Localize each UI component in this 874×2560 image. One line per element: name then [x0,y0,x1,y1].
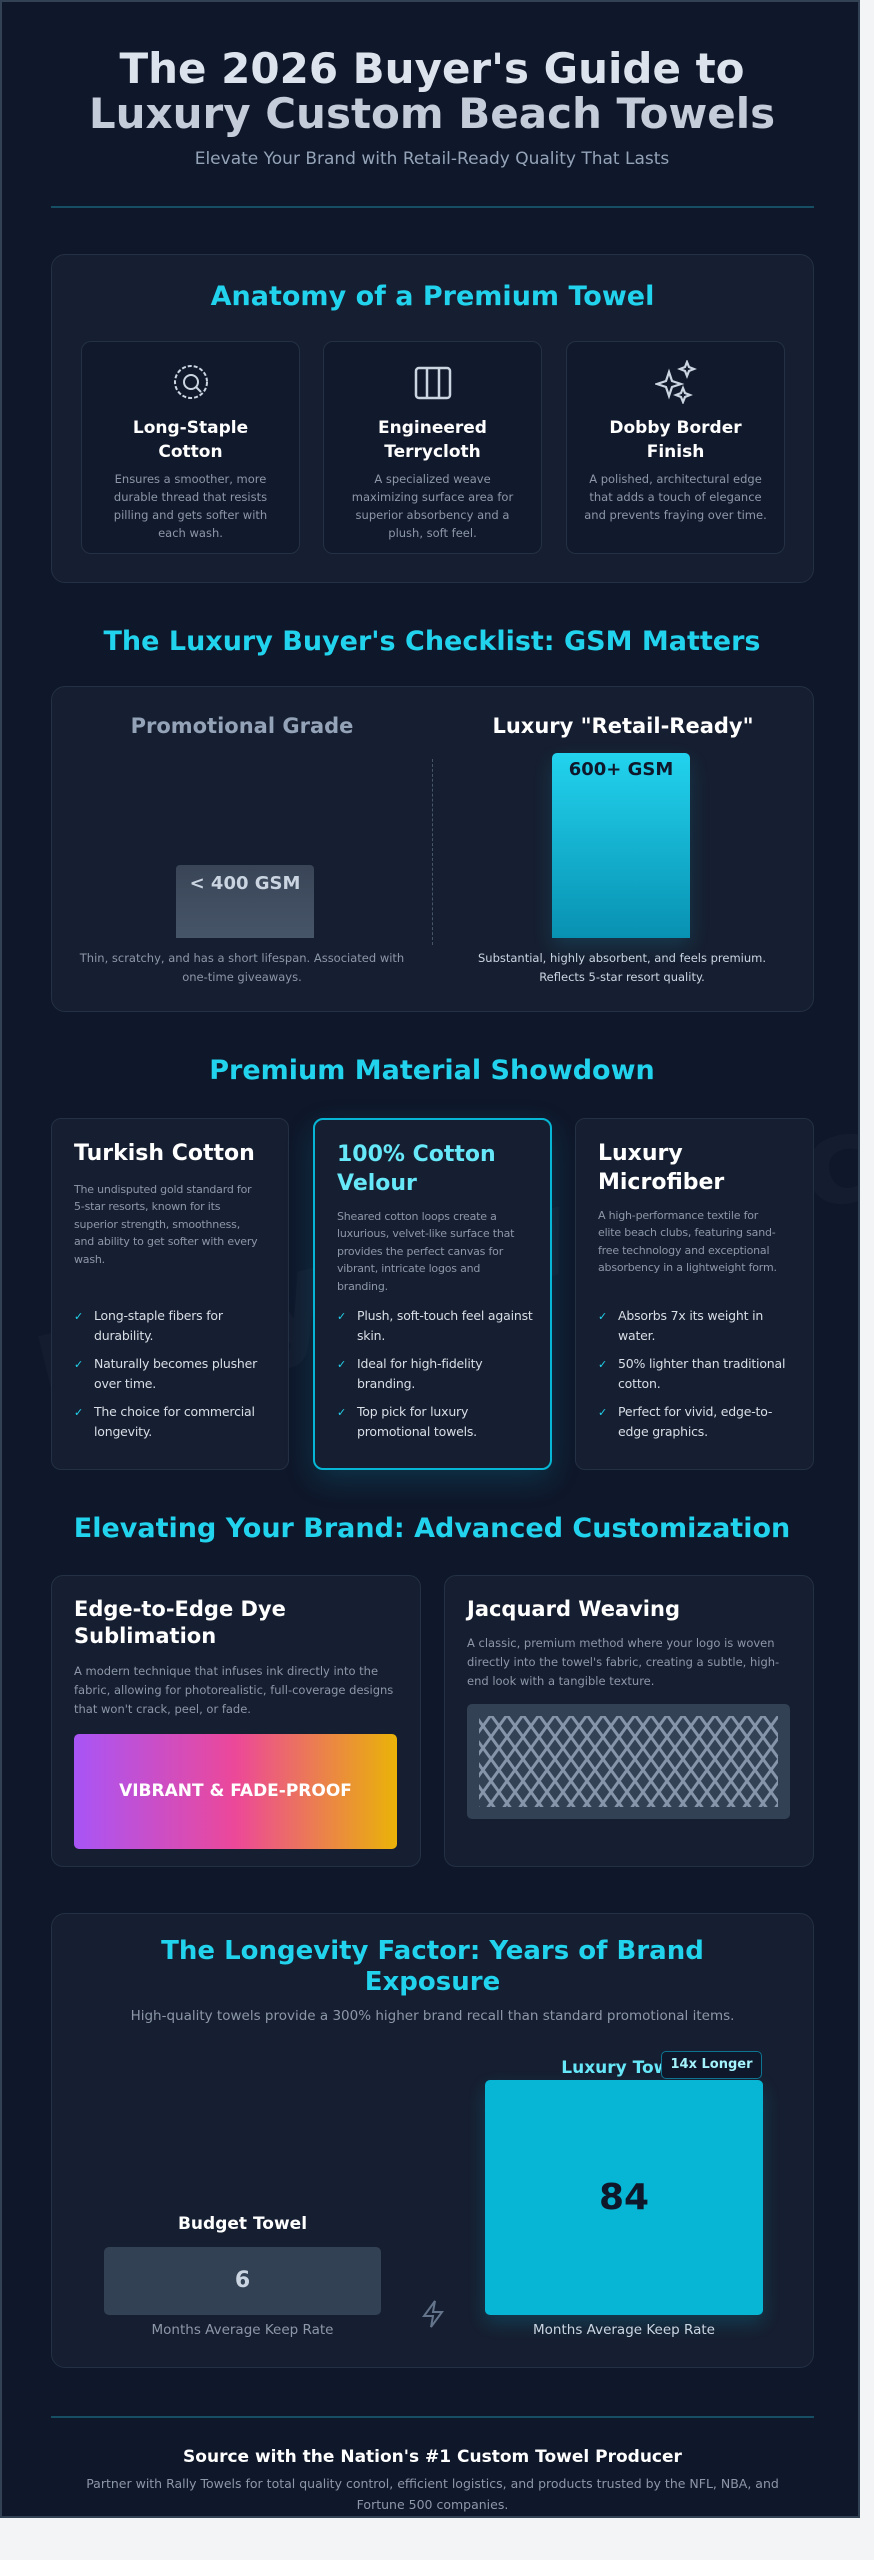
panel: longevity [51,1913,814,2368]
text: luxury desc: Substantial, highly absorbent, and feels premium. Reflects 5-star resort quality. [478,951,766,984]
card: microfiber: A high-performance textile for elite beach clubs, featuring sand-free technology and exceptional absorbency in a lightweight form. [598,1209,777,1274]
card: dye sublimation: Edge-to-Edge Dye Sublimation [74,1597,286,1648]
card: jacquard: A classic, premium method where your logo is woven directly into the towel's fabric, creating a subtle, high-end look with a tangible texture. [467,1636,779,1688]
heading: GSM: The Luxury Buyer's Checklist: GSM Matters [104,626,760,657]
heading: anatomy: Anatomy of a Premium Towel [211,281,654,312]
card: turkish cotton: Turkish Cotton [74,1141,255,1166]
panel: longevity: High-quality towels provide a 300% higher brand recall than standard promotional items. [131,2008,734,2024]
heading: customization: Elevating Your Brand: Advanced Customization [74,1513,790,1544]
bar: budget towel: Months Average Keep Rate [152,2322,333,2338]
footer: Source with the Nation's #1 Custom Towel Producer [183,2447,682,2467]
card: cotton velour (highlighted) [313,1118,552,1470]
card: engineered terrycloth: Terrycloth [384,442,481,462]
bar: 600+ GSM: 600+ GSM [569,759,673,780]
footer: Partner with Rally Towels for total quality control, efficient logistics, and products trusted by the NFL, NBA, and Fortune 500 companies. [86,2476,779,2512]
card: cotton velour (highlighted): Sheared cotton loops create a luxurious, velvet-like surface that provides the perfect canvas for vibrant, intricate logos and branding. [337,1210,514,1293]
woven pattern [467,1704,790,1819]
icon: lightning [422,2300,444,2328]
bar: 600+ GSM [552,753,690,938]
list: turkish: Long-staple fibers for durability. [94,1308,223,1343]
card: dye sublimation: A modern technique that infuses ink directly into the fabric, allowing for photorealistic, full-coverage designs that won't crack, peel, or fade. [74,1664,393,1716]
bar: budget towel [104,2214,381,2338]
subtitle: Elevate Your Brand with Retail-Ready Quality That Lasts [195,149,669,169]
card: long-staple cotton: Ensures a smoother, more durable thread that resists pilling and gets softer with each wash. [114,472,267,540]
bar: luxury towel: 84 [599,2177,649,2218]
bar: <400 GSM [176,865,314,938]
title: The 2026 Buyer's Guide to [119,44,745,93]
gradient swatch: VIBRANT & FADE-PROOF [119,1781,352,1801]
list: velour: Ideal for high-fidelity branding. [357,1356,482,1391]
list: turkish: The choice for commercial longevity. [94,1404,255,1439]
card: cotton velour (highlighted): 100% Cotton Velour [337,1142,496,1196]
card: microfiber [575,1118,814,1470]
label: luxury: Luxury "Retail-Ready" [492,714,754,738]
list: microfiber: Perfect for vivid, edge-to-edge graphics. [618,1404,772,1439]
card: jacquard: Jacquard Weaving [467,1597,680,1621]
card: microfiber: Luxury Microfiber [598,1141,724,1195]
card: dobby border: Finish [647,442,704,462]
card: engineered terrycloth: A specialized weave maximizing surface area for superior absorbency and a plush, soft feel. [352,472,513,540]
list: microfiber: 50% lighter than traditional cotton. [618,1356,785,1391]
card: long-staple cotton: Cotton [158,442,223,462]
bar: <400 GSM: < 400 GSM [190,873,300,894]
icon: sparkles [655,360,697,404]
card: engineered terrycloth: Engineered [378,418,487,438]
panel: anatomy [51,254,814,583]
icon: weave [414,366,452,400]
badge: 14x longer: 14x Longer [670,2057,752,2072]
icon: cotton [174,365,208,399]
text: promotional desc: Thin, scratchy, and has a short lifespan. Associated with one-time giveaways. [80,951,404,984]
card: dobby border: Dobby Border [609,418,742,438]
bar: budget towel: Budget Towel [178,2214,307,2234]
badge: 14x longer [661,2051,762,2079]
bar: luxury towel: Luxury Towel [561,2058,687,2078]
card: dobby border [566,341,785,554]
bar: budget towel: 6 [235,2268,250,2293]
list: turkish: Naturally becomes plusher over time. [94,1356,257,1391]
bar: luxury towel: Months Average Keep Rate [533,2322,715,2338]
label: promotional: Promotional Grade [131,714,353,738]
card: dye sublimation [51,1575,421,1867]
card: turkish cotton [51,1118,289,1470]
title: Luxury Custom Beach Towels [89,89,775,138]
card: long-staple cotton: Long-Staple [133,418,248,438]
gradient swatch [74,1734,397,1849]
card: jacquard [444,1575,814,1867]
footer [86,2447,779,2512]
card: dobby border: A polished, architectural edge that adds a touch of elegance and prevents fraying over time. [584,472,767,522]
card: turkish cotton: The undisputed gold standard for 5-star resorts, known for its superior strength, smoothness, and ability to get softer with every wash. [74,1183,257,1266]
bar: luxury towel [480,2058,768,2338]
panel: GSM comparison [51,686,814,1012]
list: velour [338,1308,533,1439]
title [89,44,775,138]
list: turkish [76,1308,258,1439]
heading: materials: Premium Material Showdown [209,1055,655,1086]
list: velour: Plush, soft-touch feel against skin. [357,1308,533,1343]
card: long-staple cotton [81,341,300,554]
heading: longevity: The Longevity Factor: Years of Brand Exposure [161,1936,704,1997]
list: microfiber: Absorbs 7x its weight in water. [618,1308,763,1343]
card: engineered terrycloth [323,341,542,554]
list: velour: Top pick for luxury promotional towels. [357,1404,477,1439]
list: microfiber [600,1308,785,1439]
